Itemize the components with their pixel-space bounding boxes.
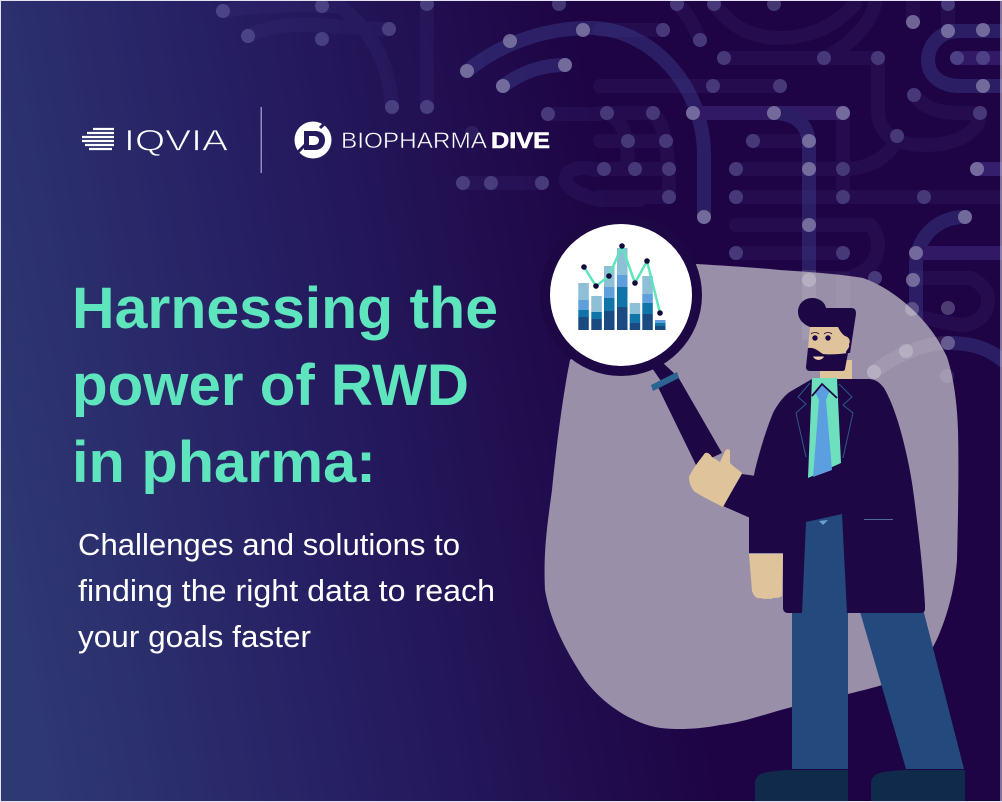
lapels xyxy=(796,383,893,520)
left hand xyxy=(749,554,783,599)
subtitle: Challenges and solutions to xyxy=(78,527,460,562)
beard xyxy=(806,348,848,371)
pattern visible through blob xyxy=(809,270,948,372)
logo: BioPharma Dive: DIVE xyxy=(491,128,550,153)
headline xyxy=(72,276,498,495)
trousers xyxy=(802,514,847,613)
jacket xyxy=(749,379,925,613)
face xyxy=(808,327,850,362)
jacket front over shirt xyxy=(806,463,846,500)
logo: BioPharma Dive xyxy=(294,122,550,158)
line chart xyxy=(581,243,663,316)
background blob xyxy=(545,264,958,729)
background dots xyxy=(216,0,990,350)
collar xyxy=(812,384,837,398)
hair xyxy=(798,298,856,353)
sleeve xyxy=(723,474,756,520)
headline: power of RWD xyxy=(72,353,469,418)
magnifying glass xyxy=(540,214,722,465)
shoes xyxy=(755,770,848,802)
logo: IQVIA xyxy=(82,124,228,158)
eyes xyxy=(811,332,832,341)
right hand xyxy=(689,449,742,507)
collar xyxy=(651,372,679,391)
background circuit pattern xyxy=(223,4,1002,360)
logo: IQVIA: IQVIA xyxy=(124,124,228,158)
logo: BioPharma Dive: BIOPHARMA xyxy=(341,128,487,153)
legs xyxy=(792,605,848,769)
tie xyxy=(813,385,832,477)
person xyxy=(689,298,965,802)
shirt tail xyxy=(819,520,828,525)
neck xyxy=(820,360,852,382)
divider xyxy=(260,107,262,173)
mouth xyxy=(813,356,824,360)
lens xyxy=(540,214,702,376)
headline: Harnessing the xyxy=(72,276,498,341)
subtitle: finding the right data to reach xyxy=(78,573,495,608)
subtitle: your goals faster xyxy=(78,619,311,654)
subtitle xyxy=(78,527,495,654)
bar chart xyxy=(578,248,666,330)
handle xyxy=(657,375,722,465)
shirt xyxy=(808,378,841,478)
headline: in pharma: xyxy=(72,430,376,495)
